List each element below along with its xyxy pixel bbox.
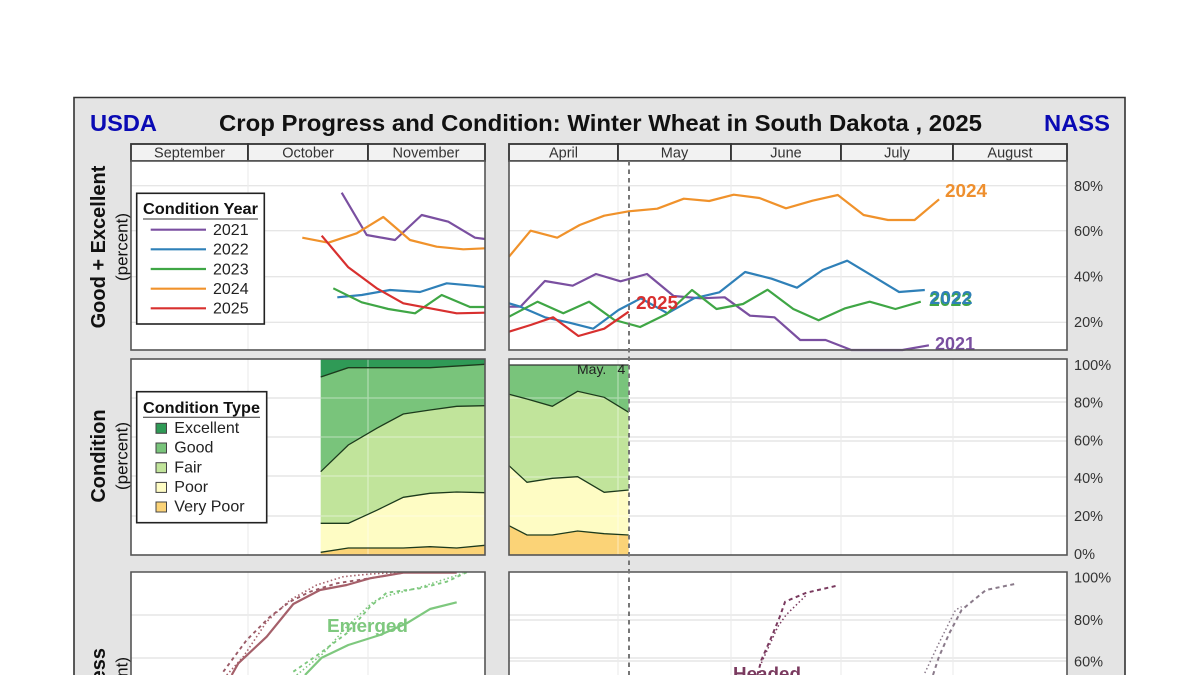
line: 2025 spring [509, 312, 629, 336]
legend: condition year: 2024 [213, 281, 249, 298]
panel: progress, fall [131, 572, 485, 675]
line: headed dotted [761, 595, 806, 663]
y axis title: good plus excellent: Good + Excellent [88, 165, 110, 328]
axis labels: condition percent: 80% [1074, 396, 1103, 412]
line: 2021 fall [342, 193, 485, 240]
axis labels: good plus excellent percent: 40% [1074, 270, 1103, 286]
legend: condition year: 2021 [213, 222, 249, 239]
panel: condition, fall [131, 359, 485, 555]
stacked area: fair [321, 406, 485, 523]
month header: fall: October [282, 146, 334, 162]
legend: condition type: Very Poor [174, 499, 245, 516]
current week marker [628, 161, 630, 675]
line: headed dashed [757, 586, 837, 675]
line: harvested dashed [933, 584, 1015, 675]
line: 2021 spring [509, 274, 929, 350]
label: 2024: 2024 [945, 181, 987, 201]
stacked area: very poor [509, 526, 629, 555]
stacked area: excellent [321, 359, 485, 377]
month header: spring and summer: July [884, 146, 911, 162]
y axis title: condition: (percent) [112, 422, 132, 490]
line: planted dotted [227, 572, 403, 675]
axis labels: good plus excellent percent [1074, 179, 1103, 331]
stacked area: poor [509, 466, 629, 535]
legend: condition type: Excellent [174, 420, 240, 437]
legend: condition type: Fair [174, 459, 203, 476]
axis labels: condition percent: 60% [1074, 434, 1103, 450]
line: 2023 spring [509, 290, 921, 327]
axis labels: progress percent: 100% [1074, 570, 1111, 586]
legend: condition year: 2025 [213, 301, 249, 318]
line: 2024 spring [509, 195, 939, 257]
stacked area: very poor [321, 545, 485, 555]
label: 2021: 2021 [935, 334, 975, 354]
axis labels: progress percent [1074, 570, 1111, 670]
month header: fall: September [154, 146, 225, 162]
y axis title: condition [88, 409, 132, 503]
legend: condition year: 2023 [213, 261, 249, 278]
y axis title: condition: Condition [88, 409, 110, 503]
title: Crop Progress and Condition: Winter Wheat in South Dakota , 2025 [219, 110, 982, 136]
line: 2022 fall [337, 283, 485, 297]
line: emerged dotted [297, 573, 463, 675]
line: 2023 fall [333, 288, 485, 313]
panel: good plus excellent, fall [131, 161, 485, 350]
axis labels: good plus excellent percent: 20% [1074, 315, 1103, 331]
month header: spring and summer: May [661, 146, 689, 162]
label: 2023: 2023 [929, 290, 972, 310]
legend: condition type: Condition Type [143, 400, 260, 417]
axis labels: condition percent: 20% [1074, 509, 1103, 525]
axis labels: progress percent: 60% [1074, 654, 1103, 670]
label: emerged: Emerged [327, 616, 408, 636]
legend: condition type [137, 392, 267, 523]
legend: condition year [137, 193, 264, 324]
legend: condition type: Poor [174, 479, 209, 496]
y axis title: good plus excellent: (percent) [112, 213, 132, 281]
legend: condition type: Good [174, 440, 213, 457]
axis labels: condition percent: 0% [1074, 547, 1095, 563]
USDA label: USDA [90, 110, 157, 136]
line: planted current [232, 573, 457, 675]
panel: progress, spring and summer [509, 572, 1067, 675]
line: emerged dashed [293, 572, 467, 672]
line: emerged current [305, 602, 457, 675]
axis labels: condition percent: 40% [1074, 471, 1103, 487]
line: 2025 fall [322, 236, 485, 313]
label: 2025: 2025 [636, 293, 678, 313]
stacked area: good [509, 365, 629, 412]
month header: fall [131, 144, 485, 162]
axis labels: good plus excellent percent: 60% [1074, 224, 1103, 240]
month header: spring and summer [509, 144, 1067, 162]
legend: condition year: 2022 [213, 242, 249, 259]
date label: May. [577, 361, 606, 377]
y axis title: good plus excellent [88, 165, 132, 328]
legend: condition year: Condition Year [143, 201, 258, 218]
panel: chart background frame [74, 98, 1125, 675]
panel: condition, spring and summer [509, 359, 1067, 555]
y axis title: progress [94, 648, 130, 675]
axis labels: progress percent: 80% [1074, 613, 1103, 629]
line: 2022 spring [509, 261, 925, 329]
line: planted dashed [223, 573, 403, 672]
month header: spring and summer: August [987, 146, 1033, 162]
month header: spring and summer: April [549, 146, 578, 162]
axis labels: good plus excellent percent: 80% [1074, 179, 1103, 195]
stacked area: good [321, 364, 485, 472]
stacked area: poor [321, 492, 485, 552]
stacked area: fair [509, 391, 629, 492]
month header: fall: November [393, 146, 460, 162]
line: 2024 fall [302, 217, 485, 249]
label: 2022: 2022 [930, 288, 972, 308]
panel: good plus excellent, spring and summer [509, 161, 1067, 354]
axis labels: condition percent: 100% [1074, 358, 1111, 374]
month header: spring and summer: June [770, 146, 802, 162]
date label: 4 [618, 361, 626, 377]
axis labels: condition percent [1074, 358, 1111, 563]
NASS label: NASS [1044, 110, 1110, 136]
line: harvested dotted [925, 607, 962, 673]
